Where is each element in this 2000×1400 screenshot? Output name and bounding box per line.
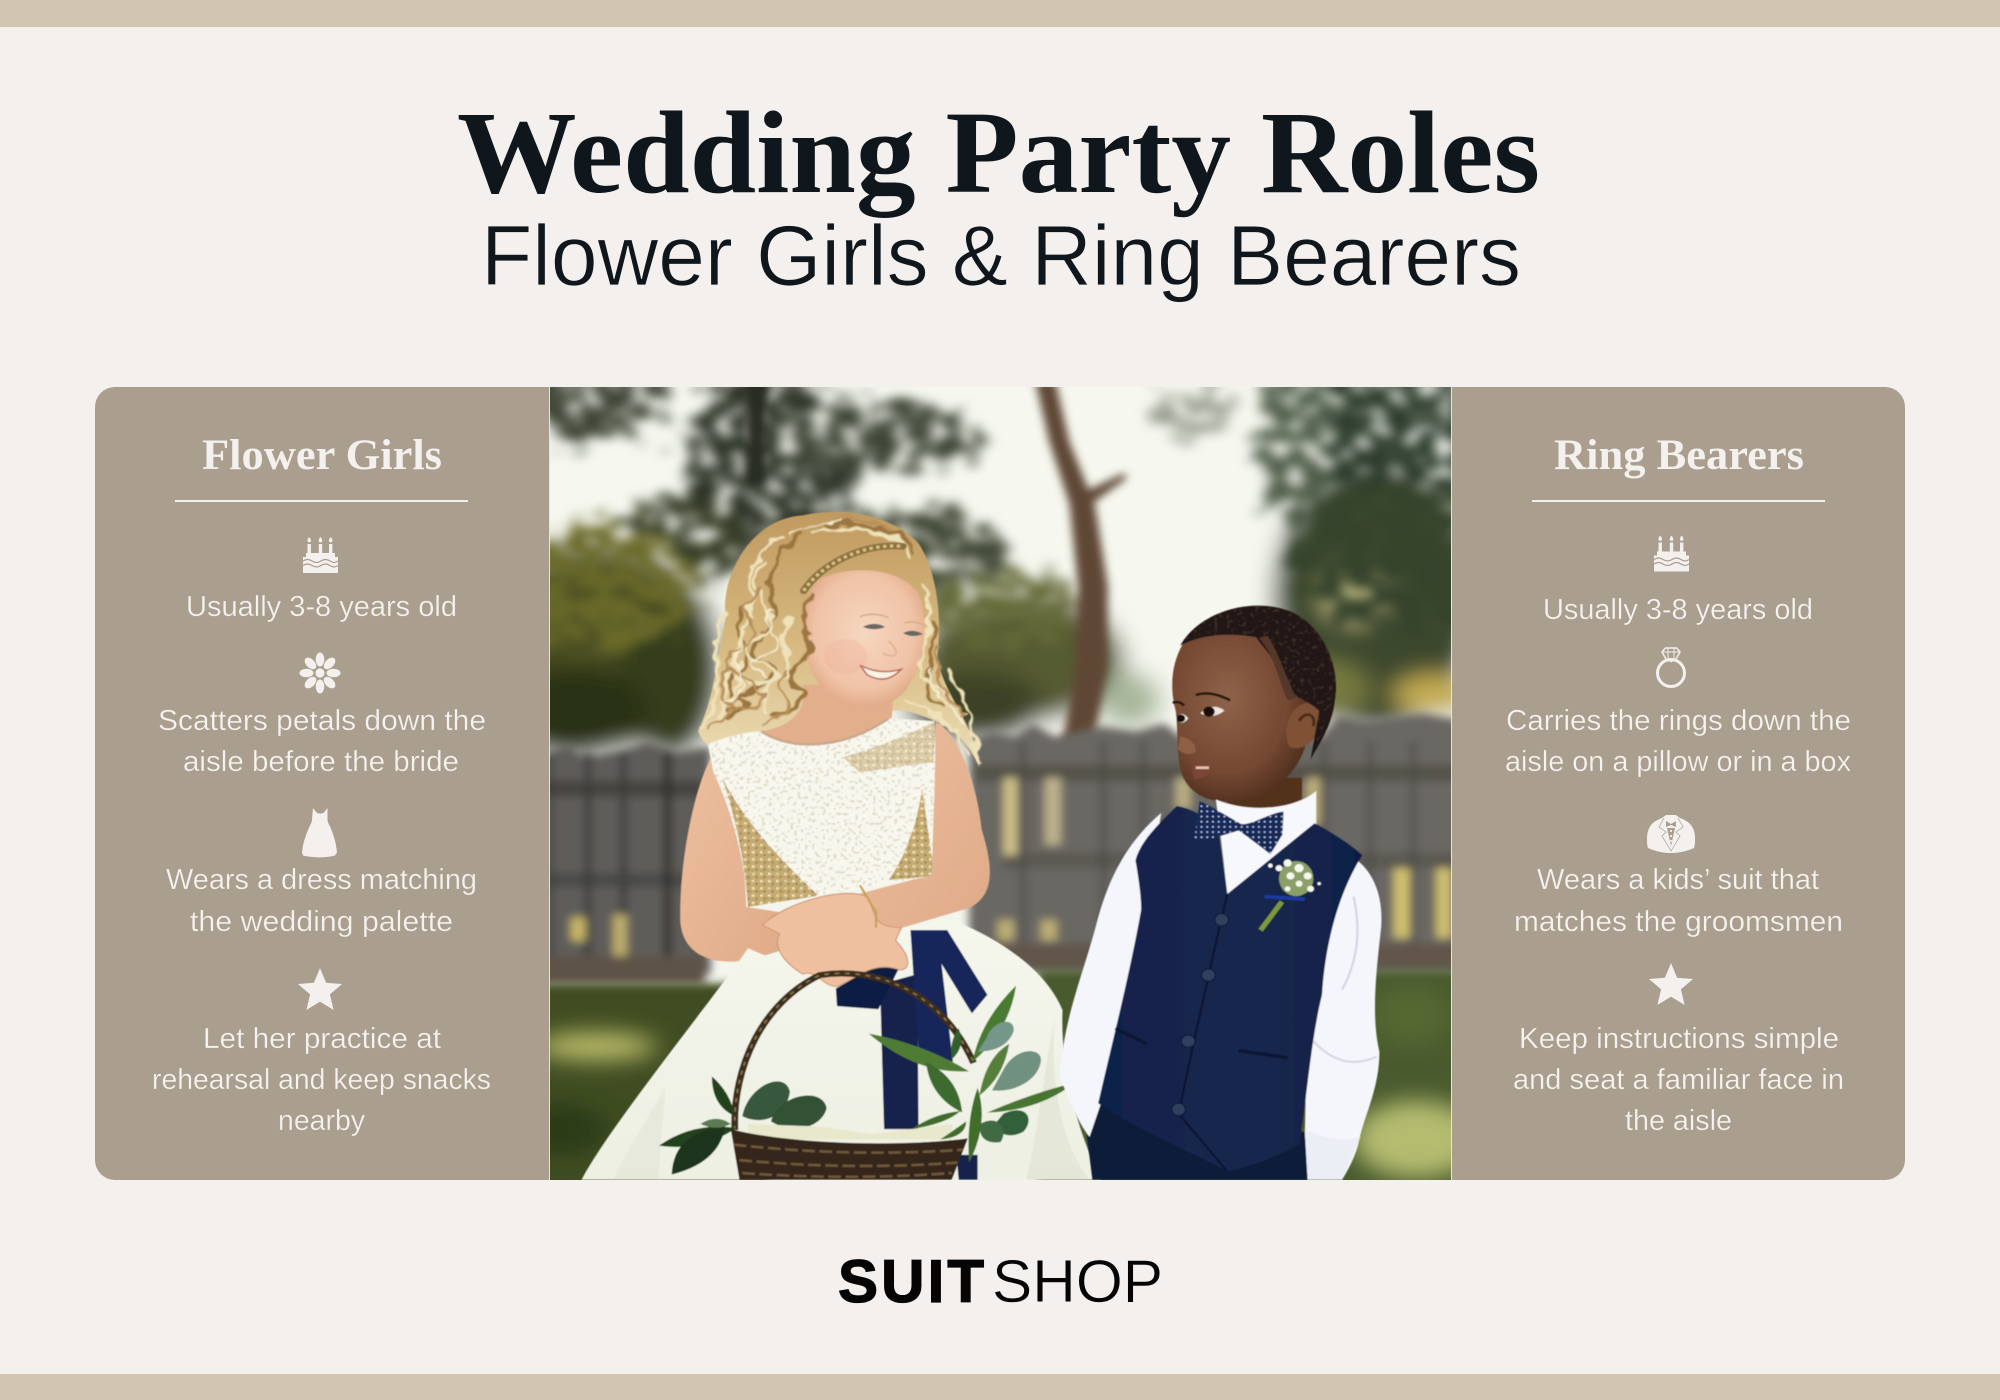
panel background right (1452, 387, 1905, 1180)
photo: flower girl and ring bearer (550, 387, 1451, 1180)
eyes and mouth (1176, 707, 1224, 723)
text: suit: Wears a kids’ suit that (1537, 864, 1819, 896)
grass (539, 983, 768, 1200)
icon: cake (303, 537, 338, 573)
shirt sleeve right (1305, 858, 1381, 1180)
flower girl (582, 512, 1101, 1180)
girl left arm (680, 753, 797, 962)
icon: ring (1658, 648, 1684, 686)
text: petals (158, 705, 486, 778)
icon: dress (302, 808, 337, 857)
text: dress: the wedding palette (190, 906, 453, 938)
heading: ring bearers: Ring Bearers (1554, 432, 1804, 479)
ring bearer (1060, 597, 1381, 1180)
panel: ring bearers (1452, 387, 1905, 1180)
text: petals: Scatters petals down the (158, 705, 486, 737)
icon: flower (300, 652, 340, 694)
neck (1224, 778, 1302, 814)
basket handle (735, 973, 974, 1130)
hands (762, 893, 908, 986)
text: dress: Wears a dress matching (166, 864, 477, 896)
panel: flower girls (95, 387, 549, 1180)
panel background left (95, 387, 549, 1180)
icon: cake (1654, 536, 1689, 572)
shirt front and collar (1216, 791, 1316, 894)
bow tie (1194, 801, 1284, 854)
logo: suit: SUIT (838, 1248, 984, 1315)
eyes, nose and smile (863, 624, 923, 636)
text: petals: aisle before the bride (183, 746, 459, 778)
boutonniere (1261, 859, 1321, 930)
bodice (708, 718, 936, 908)
text: practice: Let her practice at (203, 1023, 441, 1055)
top band (0, 0, 2000, 27)
sash and bow (880, 974, 919, 1129)
text: age: Usually 3-8 years old (186, 591, 457, 623)
petals (748, 1124, 952, 1139)
vest (1098, 806, 1362, 1171)
text: rings: aisle on a pillow or in a box (1505, 746, 1851, 778)
hair curls (699, 518, 980, 762)
text: rings: Carries the rings down the (1506, 705, 1851, 737)
text: rings (1505, 705, 1851, 778)
text: practice (152, 1023, 491, 1137)
tree trunk (748, 380, 1127, 752)
vest buttons (1172, 914, 1228, 1116)
title: Wedding Party Roles (457, 87, 1540, 218)
icon: star (298, 968, 342, 1010)
ear (1286, 703, 1322, 748)
photo edge lines (549, 387, 550, 1180)
heading: flower girls: Flower Girls (202, 432, 442, 479)
pants (1087, 1103, 1319, 1180)
hair back (698, 512, 979, 767)
hair (1180, 606, 1336, 760)
grass right (1032, 966, 1451, 1180)
text: instructions: the aisle (1625, 1105, 1732, 1137)
logo: shop: SHOP (992, 1248, 1163, 1315)
logo (838, 1248, 1163, 1315)
text: instructions: and seat a familiar face in (1513, 1064, 1844, 1096)
text: suit (1514, 864, 1843, 938)
girl right arm (848, 722, 990, 937)
text: instructions: Keep instructions simple (1519, 1023, 1839, 1055)
icon: tuxedo (1647, 815, 1695, 853)
dappled tree canopy (550, 387, 1451, 658)
text: practice: nearby (278, 1105, 365, 1137)
head (1172, 623, 1312, 802)
girl neck (764, 684, 894, 744)
text: age: Usually 3-8 years old (1543, 594, 1813, 626)
background fence (539, 713, 1480, 984)
girl face (805, 570, 924, 707)
text: suit: matches the groomsmen (1514, 906, 1843, 938)
subtitle: Flower Girls & Ring Bearers (481, 209, 1521, 304)
text: instructions (1513, 1023, 1844, 1137)
leaves right (869, 985, 1075, 1163)
icon: star (1649, 963, 1693, 1005)
shirt sleeve left (1060, 813, 1161, 1137)
text: dress (166, 864, 477, 938)
skirt (582, 920, 1101, 1180)
headband (804, 546, 903, 591)
bottom band (0, 1374, 2000, 1400)
background sky and lower tree mass (550, 462, 1451, 758)
photo edge line right (1451, 387, 1452, 1180)
text: practice: rehearsal and keep snacks (152, 1064, 491, 1096)
grass highlights (516, 984, 1480, 1178)
basket (731, 1129, 968, 1180)
leaves left (659, 1076, 827, 1175)
